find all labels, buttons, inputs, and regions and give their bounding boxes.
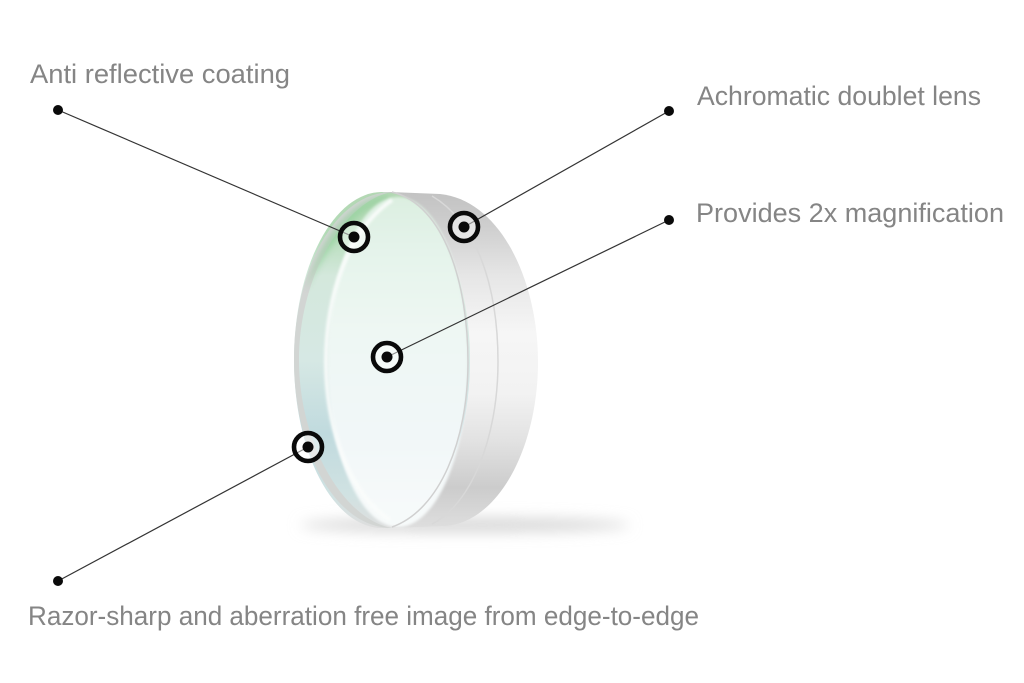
leader line [464,111,669,227]
callout: anti reflective coating [30,59,368,251]
lens shadow [300,518,630,532]
inner bevel highlight [326,200,392,520]
target marker [294,433,322,461]
rim seam between the two elements [432,196,498,524]
leader line [58,110,354,237]
outer grey edge [294,192,392,528]
label: Razor-sharp and aberration free image from edge-to-edge [28,601,699,631]
start dot [664,106,674,116]
green highlight [308,193,388,284]
target marker [340,223,368,251]
start dot [53,576,63,586]
callout: provides 2x magnification [373,198,1004,371]
leader line [387,220,669,357]
target marker [450,213,478,241]
lens rim [294,192,538,528]
callout: achromatic doublet lens [450,81,981,241]
label: Anti reflective coating [30,59,290,89]
doublet lens illustration [294,192,538,528]
label: Provides 2x magnification [696,198,1004,228]
inner lens face [328,197,468,527]
leader line [58,447,308,581]
front outer bevel [294,192,470,528]
start dot [53,105,63,115]
front edge line [392,192,468,527]
callout: razor-sharp image [28,433,699,631]
start dot [664,215,674,225]
target marker [373,343,401,371]
label: Achromatic doublet lens [697,81,981,111]
